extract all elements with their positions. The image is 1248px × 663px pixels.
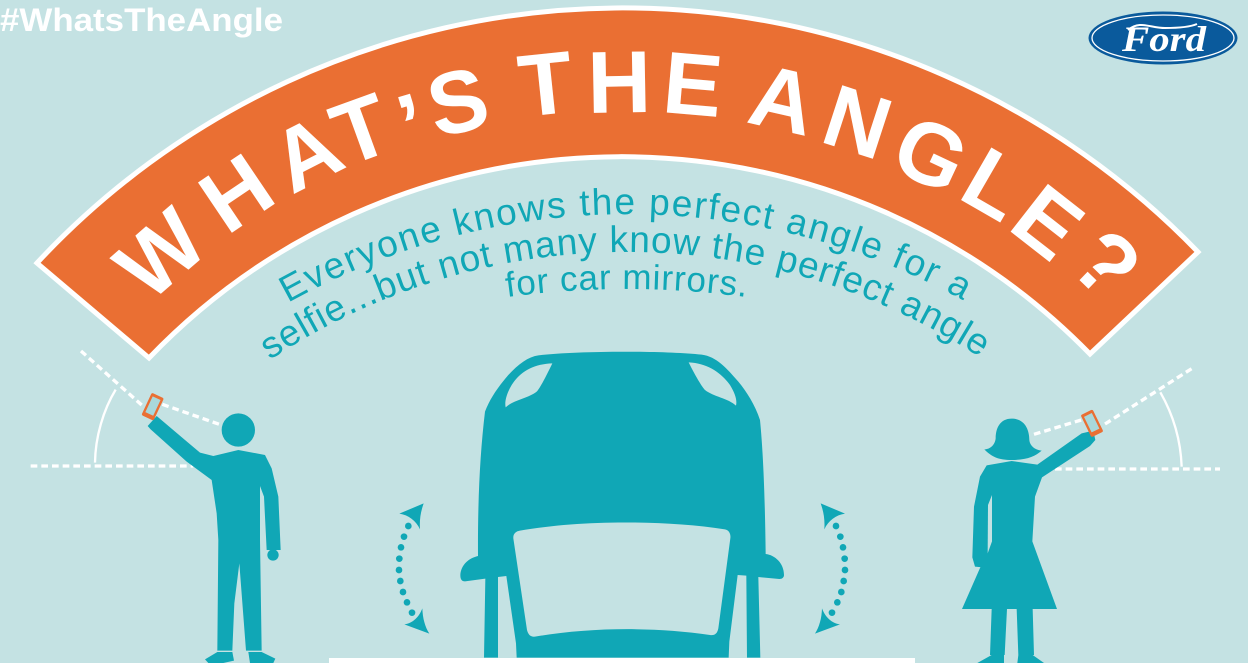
woman taking selfie: [962, 369, 1220, 663]
man phone: [141, 393, 164, 421]
car right headlight: [689, 362, 736, 406]
woman figure: [962, 419, 1095, 663]
man figure: [148, 413, 281, 663]
woman phone: [1081, 409, 1103, 437]
car left headlight: [505, 363, 552, 407]
man taking selfie: [31, 351, 281, 663]
woman angle guide lines: [1034, 369, 1220, 469]
car: [460, 352, 784, 658]
title text: WHAT’S THE ANGLE?: [97, 32, 1160, 318]
right mirror arrow: [815, 503, 848, 634]
white bar at bottom: [329, 658, 915, 663]
subtitle: Everyone knows the perfect angle for a: [278, 188, 968, 302]
hashtag: #WhatsTheAngle: [0, 2, 283, 38]
left mirror arrow: [396, 503, 429, 634]
Ford logo: Ford: [1121, 19, 1207, 59]
man angle guide lines: [31, 351, 219, 466]
Ford logo: [1088, 12, 1238, 64]
subtitle: selfie...but not many know the perfect angle: [262, 225, 986, 358]
subtitle: for car mirrors.: [505, 264, 744, 297]
car windscreen: [513, 522, 730, 637]
